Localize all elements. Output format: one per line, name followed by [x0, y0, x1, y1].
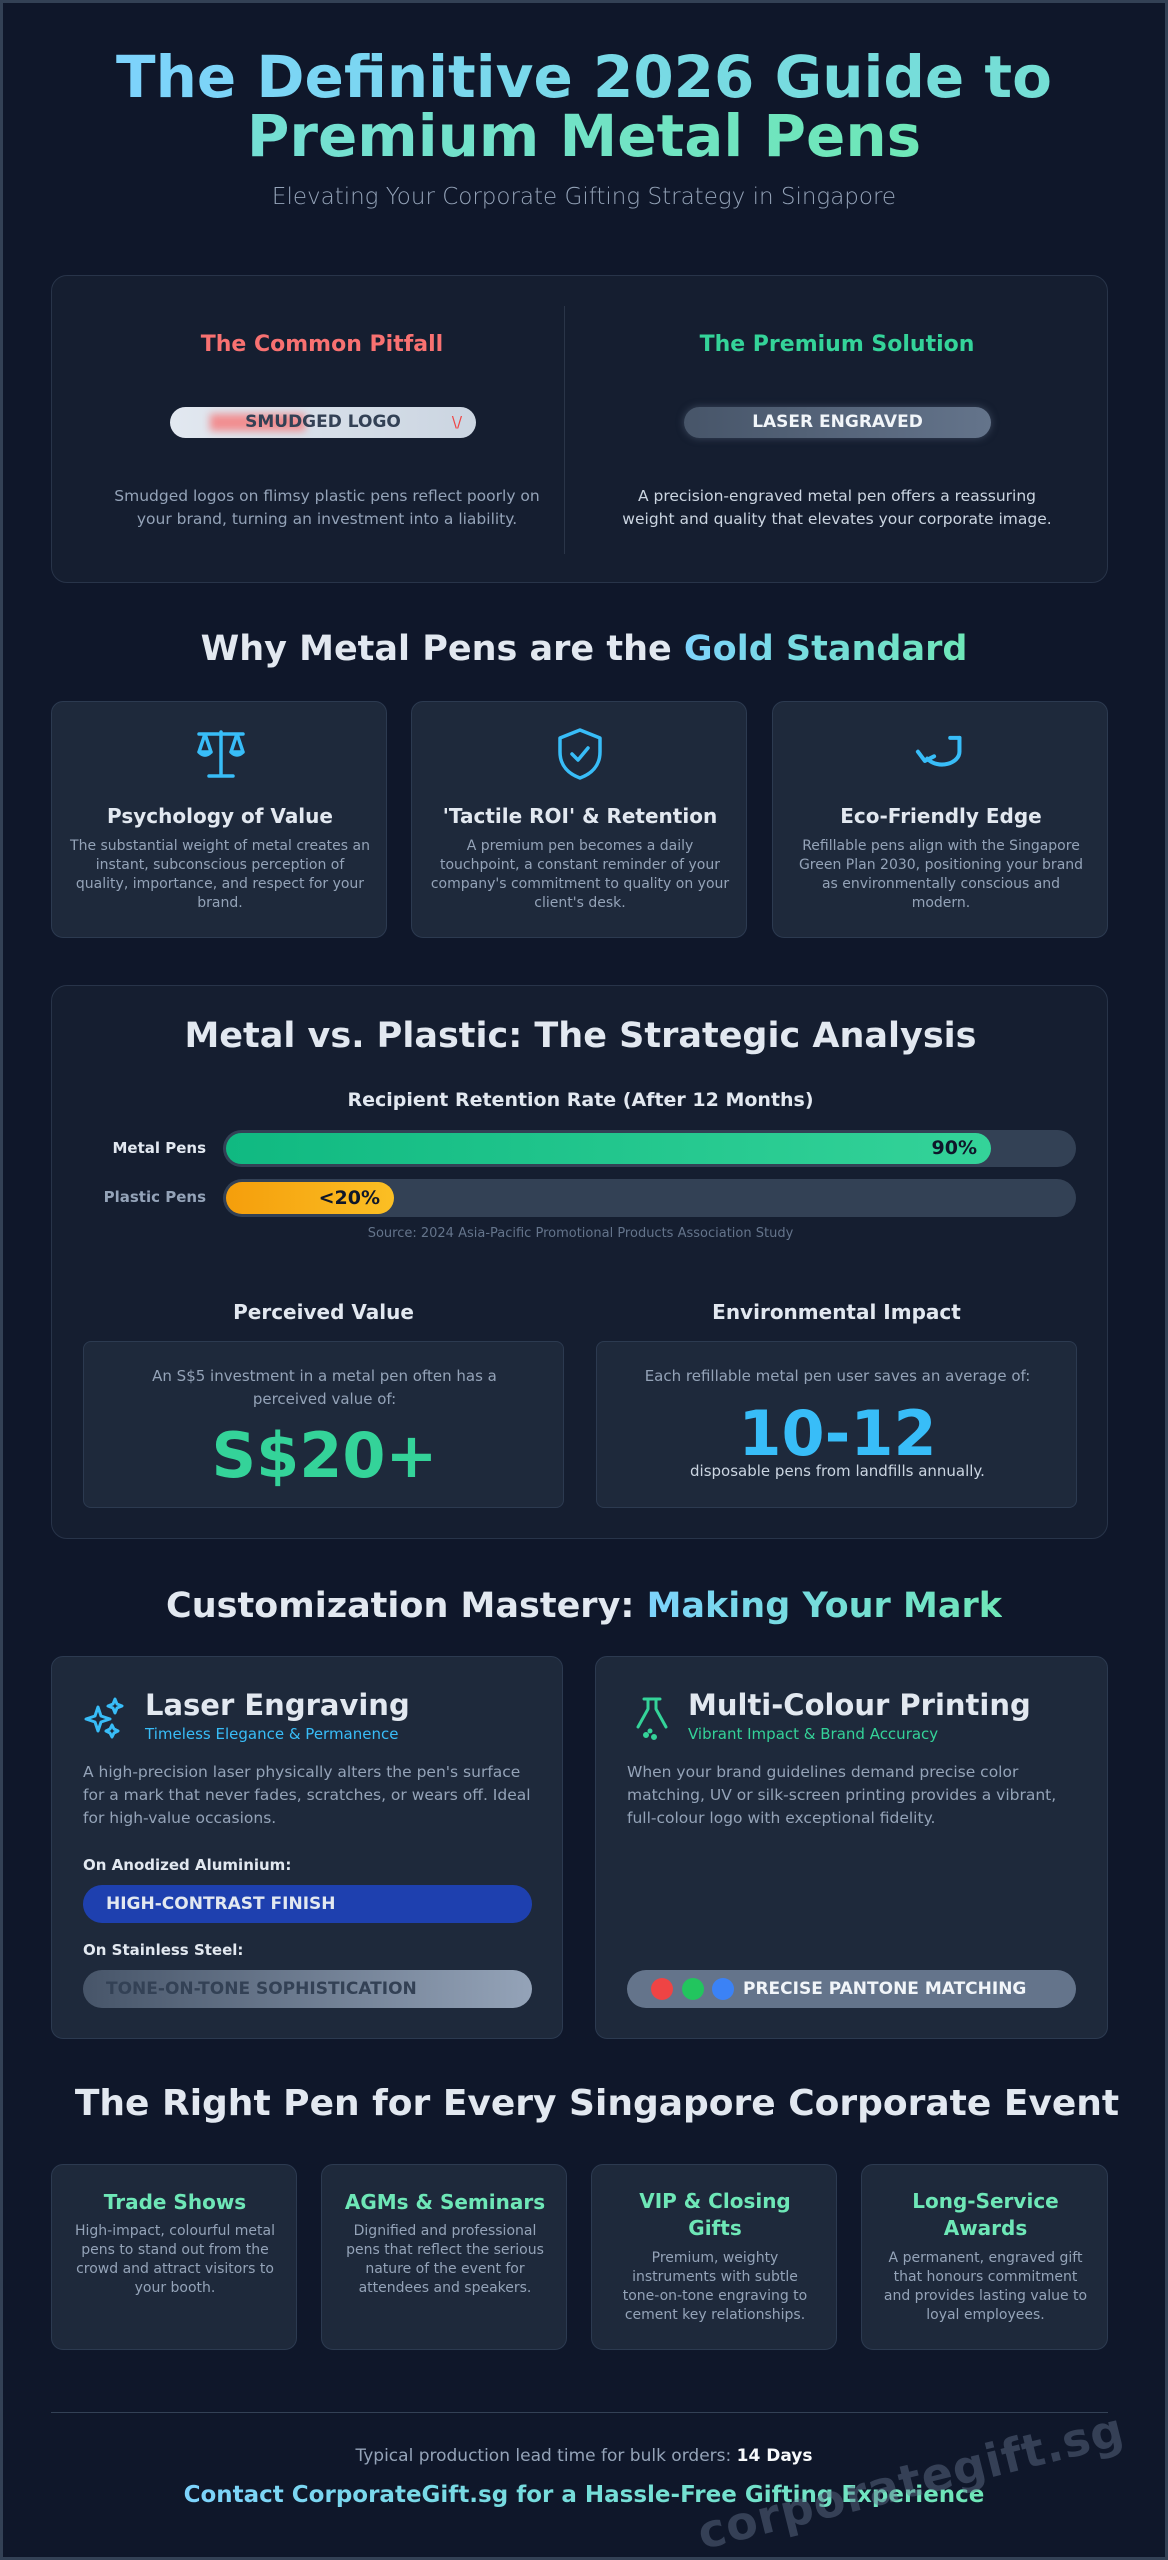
subtitle: Timeless Elegance & Permanence [145, 1725, 398, 1743]
title [116, 43, 1052, 170]
pill: smudged logo: SMUDGED LOGO [245, 412, 401, 432]
text: When your brand guidelines demand precise color matching, UV or silk-screen printing provides a vibrant, full-colour logo with exceptional fidelity. [627, 1763, 1056, 1827]
text: pitfall description: Smudged logos on flimsy plastic pens reflect poorly on your brand, turning an investment into a liability. [114, 487, 540, 528]
heading: premium solution: The Premium Solution [700, 332, 974, 357]
subtitle: Vibrant Impact & Brand Accuracy [688, 1725, 938, 1743]
icon: flask [636, 1698, 668, 1740]
card: long-service: A permanent, engraved gift that honours commitment and provides lasting value to loyal employees. [884, 2250, 1087, 2323]
chart: retention bars: 90% [932, 1137, 977, 1159]
box: environmental impact: disposable pens from landfills annually. [690, 1462, 985, 1480]
footer: contact: Contact CorporateGift.sg for a Hassle-Free Gifting Experience [184, 2482, 984, 2508]
title: Psychology of Value [107, 804, 333, 828]
icon: sparkles [84, 1698, 124, 1739]
chart: retention bars: Metal Pens [112, 1139, 206, 1157]
title: Multi-Colour Printing [688, 1688, 1031, 1722]
text: The substantial weight of metal creates an instant, subconscious perception of quality, importance, and respect for your brand. [70, 838, 370, 911]
card: AGMs [321, 2164, 567, 2350]
text: A high-precision laser physically alters the pen's surface for a mark that never fades, scratches, or wears off. Ideal for high-value occasions. [83, 1763, 531, 1827]
pill: smudged logo: \/ [452, 413, 462, 431]
label: anodized: On Anodized Aluminium: [83, 1856, 291, 1874]
chart: retention bars: Source: 2024 Asia-Pacific Promotional Products Association Study [368, 1226, 793, 1241]
card: AGMs: Dignified and professional pens that reflect the serious nature of the event for attendees and speakers. [346, 2223, 544, 2296]
card: laser engraving [51, 1656, 563, 2039]
icon: scales [197, 730, 245, 778]
pill: pantone [627, 1970, 1076, 2008]
card: trade shows: Trade Shows [104, 2190, 246, 2214]
card: tactile ROI [411, 701, 747, 938]
card: eco-friendly [772, 701, 1108, 938]
heading: environmental impact: Environmental Impact [712, 1300, 961, 1324]
title: 'Tactile ROI' & Retention [443, 804, 717, 828]
pill: pantone: PRECISE PANTONE MATCHING [743, 1979, 1026, 1999]
card: long-service [861, 2164, 1108, 2350]
subtitle: Elevating Your Corporate Gifting Strategy in Singapore [272, 184, 896, 210]
box: perceived value: An S$5 investment in a metal pen often has a perceived value of: [152, 1367, 497, 1408]
pill: laser engraved: LASER ENGRAVED [752, 412, 923, 432]
heading: gold standard: Why Metal Pens are the Gold Standard [201, 629, 967, 669]
heading: customization: Customization Mastery: Making Your Mark [166, 1586, 1002, 1626]
card: VIP: Gifts [688, 2216, 742, 2240]
heading: events: The Right Pen for Every Singapore Corporate Event [75, 2083, 1119, 2124]
card: multi-colour printing [595, 1656, 1108, 2039]
text: solution description: A precision-engraved metal pen offers a reassuring weight and quality that elevates your corporate image. [622, 487, 1052, 528]
chart: retention bars: <20% [319, 1187, 380, 1209]
pill: smudged logo [170, 407, 476, 438]
panel: pitfall vs solution [51, 275, 1108, 583]
title: Eco-Friendly Edge [840, 804, 1042, 828]
label: stainless: On Stainless Steel: [83, 1941, 243, 1959]
chart: retention bars: Plastic Pens [104, 1188, 206, 1206]
title: The Definitive 2026 Guide to [116, 43, 1052, 111]
heading: perceived value: Perceived Value [233, 1300, 414, 1324]
card: AGMs: AGMs & Seminars [345, 2190, 545, 2214]
box: perceived value [83, 1341, 564, 1508]
card: trade shows [51, 2164, 297, 2350]
watermark: corporategift.sg [692, 2402, 1129, 2560]
box: environmental impact [596, 1341, 1077, 1508]
icon: recycle arrow [916, 736, 962, 767]
card: VIP [591, 2164, 837, 2350]
box: environmental impact: Each refillable metal pen user saves an average of: [645, 1367, 1030, 1385]
card: VIP: VIP & Closing [639, 2189, 791, 2213]
text: Refillable pens align with the Singapore Green Plan 2030, positioning your brand as environmentally conscious and modern. [799, 838, 1083, 911]
title: Premium Metal Pens [247, 102, 921, 170]
icon: shield [558, 728, 602, 780]
pill: laser engraved [684, 407, 991, 438]
card: long-service: Awards [944, 2216, 1027, 2240]
pill: tone on tone [83, 1970, 532, 2008]
card: long-service: Long-Service [912, 2189, 1059, 2213]
pill: tone on tone: TONE-ON-TONE SOPHISTICATION [106, 1979, 417, 1999]
box: environmental impact: 10-12 [738, 1397, 937, 1470]
pill: high contrast [83, 1885, 532, 1923]
chart: retention bars [104, 1089, 1076, 1241]
heading: Metal vs. Plastic: The Strategic Analysis [184, 1016, 977, 1056]
card: psychology of value [51, 701, 387, 938]
box: perceived value: S$20+ [211, 1419, 438, 1492]
title: Laser Engraving [145, 1688, 410, 1722]
heading: common pitfall: The Common Pitfall [201, 332, 443, 357]
text: A premium pen becomes a daily touchpoint, a constant reminder of your company's commitment to quality on your client's desk. [431, 838, 729, 911]
panel: strategic analysis [51, 985, 1108, 1539]
card: VIP: Premium, weighty instruments with subtle tone-on-tone engraving to cement key relationships. [623, 2250, 807, 2323]
chart: retention bars: Recipient Retention Rate (After 12 Months) [347, 1089, 814, 1111]
card: trade shows: High-impact, colourful metal pens to stand out from the crowd and attract visitors to your booth. [75, 2223, 275, 2296]
pill: high contrast: HIGH-CONTRAST FINISH [106, 1894, 336, 1914]
footer: lead time: Typical production lead time for bulk orders: 14 Days [356, 2446, 812, 2466]
